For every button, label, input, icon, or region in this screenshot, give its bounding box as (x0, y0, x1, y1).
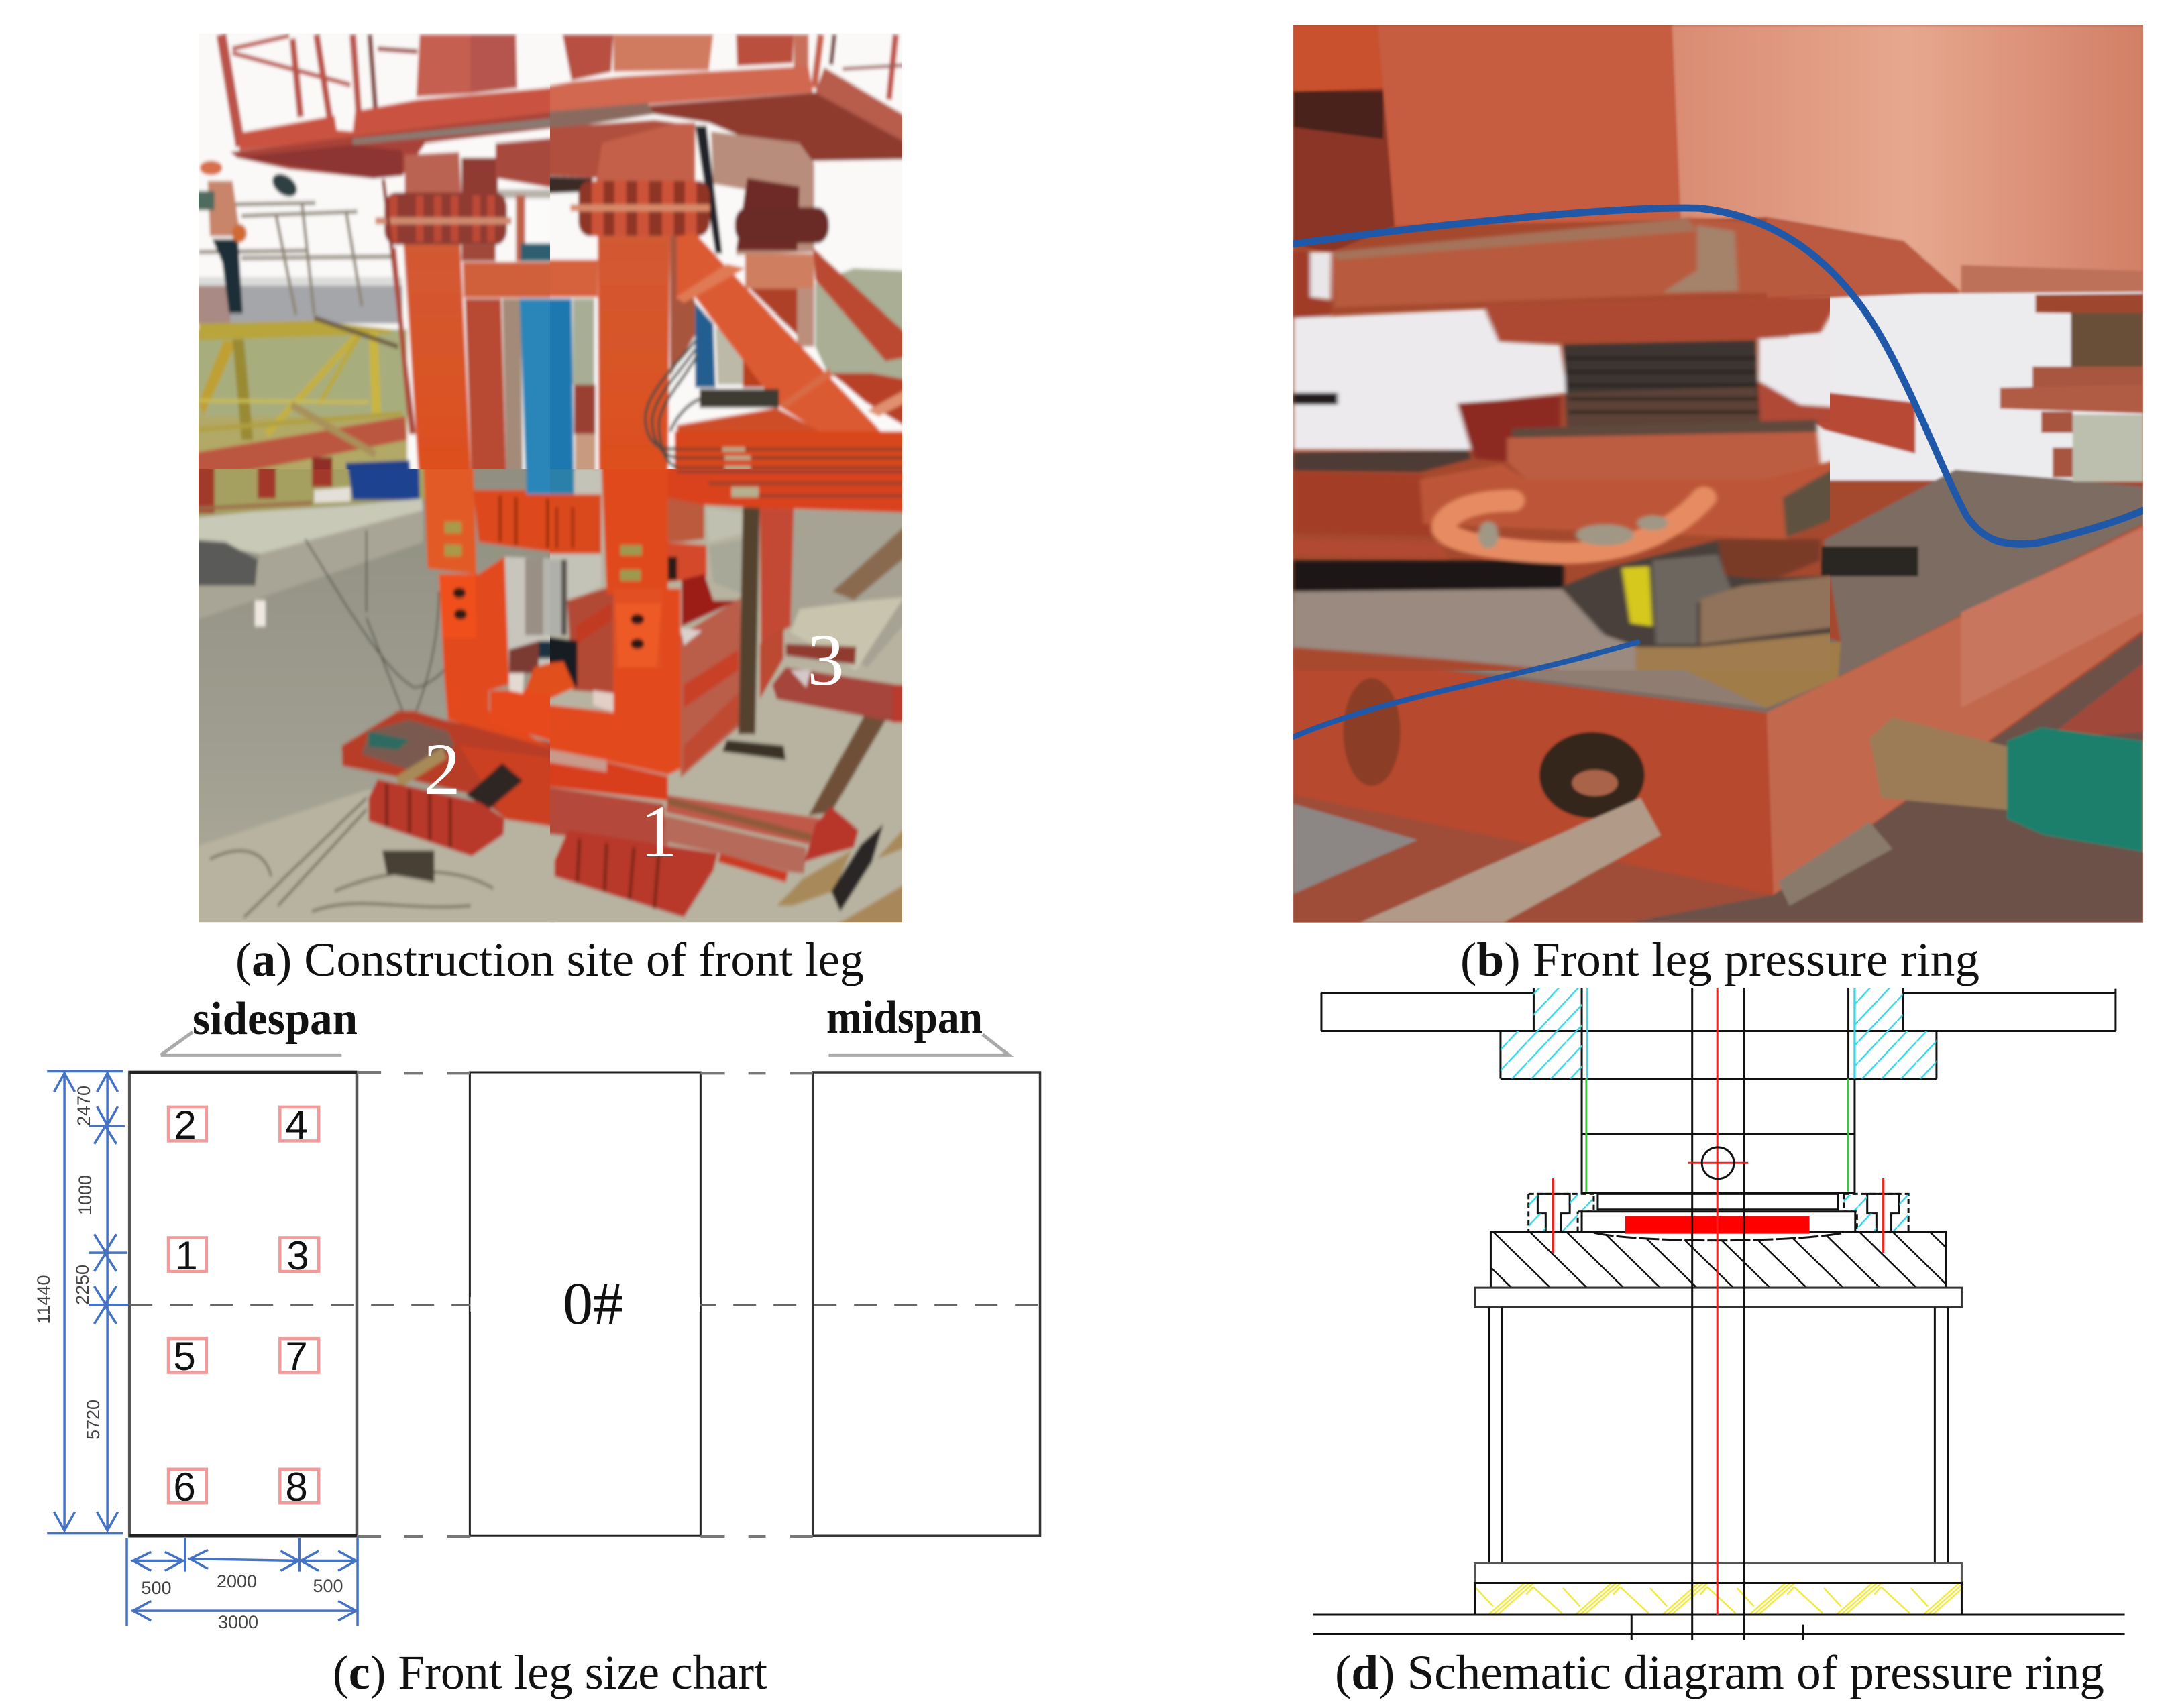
midspan label: midspan (826, 992, 983, 1043)
label 1: 1 (640, 791, 677, 872)
cyan hatched collars (1501, 988, 1937, 1232)
centre lines (1692, 988, 1744, 1640)
vertical dimension labels (34, 1086, 103, 1440)
photo b base scene (1274, 13, 2167, 948)
marker numbers: 1 (175, 1233, 198, 1278)
blue sensor cable (1293, 208, 2143, 737)
panel d: schematic of pressure ring (1313, 988, 2125, 1640)
caption b: (b) Front leg pressure ring (1460, 933, 1979, 986)
photo a lower left: parapet, ground and outrigger (199, 469, 554, 923)
ground lines (1313, 1615, 2125, 1640)
horizontal dimension labels (141, 1571, 343, 1632)
photo a lower right: leg base, rear frame and rails (550, 469, 902, 923)
photo a upper right: column, flanges, brace and hoses (550, 34, 902, 483)
vertical dimension labels: 2250 (72, 1265, 93, 1305)
panel a: construction site photo (185, 9, 922, 946)
horizontal dimension labels: 500 (141, 1578, 172, 1598)
pressure ring seats (1582, 1194, 1855, 1232)
vertical dimension labels: 11440 (34, 1275, 54, 1324)
panel b: pressure ring photo (1274, 13, 2167, 948)
caption d: (d) Schematic diagram of pressure ring (1335, 1646, 2104, 1699)
yellow hatched footing (1475, 1583, 1961, 1615)
marker numbers (173, 1102, 309, 1510)
blue dimension lines (47, 1072, 358, 1626)
load cell red block (1625, 1216, 1810, 1234)
label leaders (161, 1032, 1009, 1055)
panel c: front leg size chart (34, 992, 1040, 1632)
marker numbers: 8 (285, 1465, 308, 1510)
photo a upper left: railing, worker and crane (199, 34, 550, 469)
vertical dimension labels: 5720 (83, 1400, 103, 1440)
photo b jack and load cell detail (1293, 218, 1841, 671)
horizontal dimension labels: 500 (313, 1576, 343, 1596)
marker numbers: 5 (173, 1334, 196, 1379)
vertical dimension labels: 1000 (75, 1175, 95, 1215)
caption a: (a) Construction site of front leg (235, 933, 864, 986)
hatched base block (1490, 1232, 1953, 1289)
label 3: 3 (808, 619, 844, 701)
vertical dimension labels: 2470 (74, 1086, 94, 1126)
marker numbers: 6 (173, 1465, 196, 1510)
marker numbers: 2 (174, 1102, 197, 1147)
marker numbers: 7 (285, 1334, 308, 1379)
horizontal dimension labels: 3000 (218, 1612, 258, 1632)
marker numbers: 4 (285, 1102, 308, 1147)
upper plate and collar outline (1321, 988, 2116, 1194)
horizontal dimension labels: 2000 (217, 1571, 257, 1591)
chart linework (47, 1032, 1040, 1626)
side frame (1475, 1288, 1961, 1583)
caption c: (c) Front leg size chart (333, 1646, 767, 1699)
span rectangles (129, 1072, 1040, 1536)
sidespan label: sidespan (193, 993, 358, 1045)
pin circle (1702, 1147, 1734, 1179)
numbered marker boxes (168, 1107, 319, 1503)
label 2: 2 (424, 728, 460, 810)
central pier label: 0# (563, 1271, 623, 1337)
cyan and green guide lines (1588, 988, 1855, 1078)
marker numbers: 3 (286, 1233, 309, 1278)
clamp bolts (1529, 1194, 1908, 1232)
